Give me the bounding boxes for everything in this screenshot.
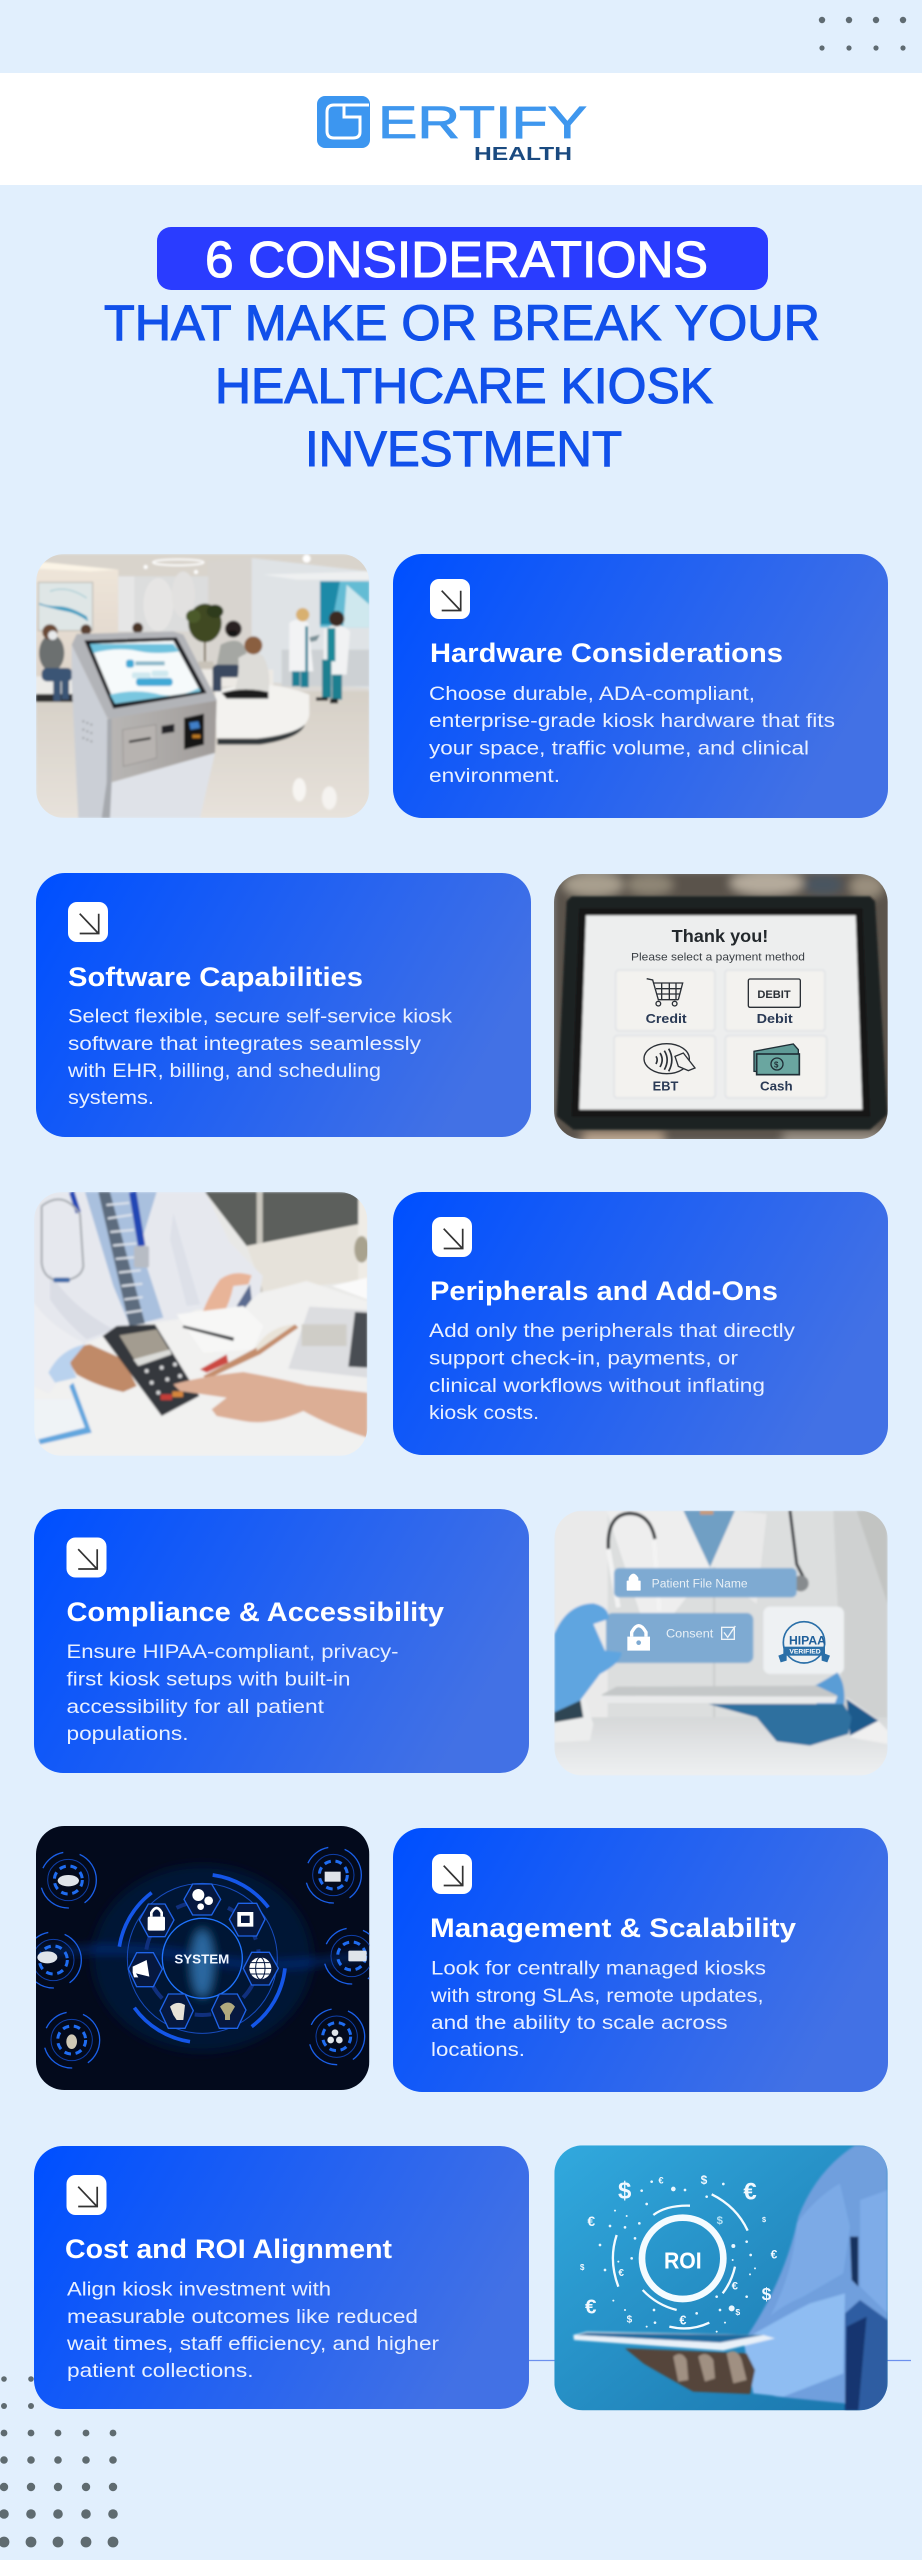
currency symbols: € — [771, 2247, 778, 2261]
ROI label: ROI — [664, 2247, 702, 2273]
card 3: peripherals and add-ons — [393, 1192, 888, 1455]
body text: Select flexible, secure self-service kiosk — [68, 1006, 452, 1028]
body text: accessibility for all patient — [66, 1696, 325, 1718]
body text: clinical workflows without inflating — [429, 1375, 765, 1397]
icon: arrow — [430, 579, 470, 619]
decorative dots: bottom left — [0, 2376, 118, 2547]
card background — [393, 554, 888, 818]
glow — [36, 1865, 369, 2052]
title line 4: INVESTMENT — [305, 421, 622, 477]
currency symbols: $ — [580, 2263, 585, 2272]
photo: doctor with payment terminal — [34, 1192, 369, 1456]
body text: software that integrates seamlessly — [68, 1033, 421, 1055]
card 5: management and scalability — [393, 1828, 888, 2092]
icon: arrow — [432, 1854, 472, 1894]
satellites — [25, 1847, 380, 2068]
body text — [429, 1320, 795, 1424]
card 6: cost and ROI alignment — [34, 2146, 529, 2409]
body text: systems. — [68, 1087, 154, 1109]
photo: system management network — [25, 1826, 380, 2090]
heading: Cost and ROI Alignment — [65, 2234, 392, 2264]
photo: payment selection screen — [550, 868, 897, 1145]
hexagons — [128, 1884, 278, 2028]
sleeve — [573, 2145, 888, 2410]
title block — [104, 227, 820, 477]
body text — [67, 1006, 452, 1109]
decorative dots: top right — [819, 17, 906, 51]
body text: populations. — [66, 1723, 188, 1745]
body text: with EHR, billing, and scheduling — [67, 1060, 381, 1082]
screen text: Cash — [760, 1079, 793, 1094]
particles — [599, 2180, 756, 2333]
body text: Look for centrally managed kiosks — [431, 1958, 766, 1980]
body text: support check-in, payments, or — [429, 1348, 739, 1370]
photo: kiosk in clinic lobby — [36, 554, 369, 818]
coat and desk — [554, 1511, 888, 1776]
hologram rings — [613, 2194, 748, 2328]
body text: kiosk costs. — [429, 1402, 539, 1424]
body text — [430, 1958, 766, 2061]
body text: enterprise-grade kiosk hardware that fits — [429, 710, 835, 732]
card background — [393, 1828, 888, 2092]
body text: locations. — [431, 2039, 525, 2061]
body text: Align kiosk investment with — [67, 2278, 331, 2300]
currency symbols: $ — [735, 2307, 740, 2317]
screen text: EBT — [653, 1079, 678, 1094]
logo: Certify Health: HEALTH — [474, 144, 572, 164]
title line 3: HEALTHCARE KIOSK — [215, 358, 713, 414]
header band with logo — [0, 73, 922, 185]
heading: Management & Scalability — [430, 1913, 796, 1943]
icon: arrow — [68, 902, 108, 942]
currency symbols: € — [679, 2313, 686, 2327]
icon: arrow — [432, 1217, 472, 1257]
heading: Software Capabilities — [68, 962, 363, 992]
screen text: DEBIT — [757, 989, 791, 1001]
body text: patient collections. — [67, 2360, 253, 2382]
card background — [393, 1192, 888, 1455]
screen text — [631, 926, 805, 1094]
currency symbols: € — [743, 2178, 757, 2205]
heading: Peripherals and Add-Ons — [430, 1276, 778, 1306]
screen text: Debit — [757, 1011, 793, 1026]
currency symbols: € — [587, 2213, 595, 2229]
heading: Hardware Considerations — [430, 638, 783, 668]
heading: Compliance & Accessibility — [66, 1597, 444, 1627]
title pill — [157, 227, 768, 290]
body text: first kiosk setups with built-in — [66, 1668, 350, 1690]
currency symbols: € — [585, 2295, 597, 2318]
dark background — [36, 1826, 369, 2090]
body text: and the ability to scale across — [431, 2012, 728, 2034]
title line 2: THAT MAKE OR BREAK YOUR — [104, 295, 820, 351]
card background — [36, 873, 531, 1137]
screen text: $ — [774, 1060, 779, 1069]
currency symbols: € — [732, 2280, 739, 2292]
rings — [119, 1875, 285, 2042]
logo: Certify Health — [317, 96, 587, 164]
body text: with strong SLAs, remote updates, — [430, 1985, 764, 2007]
body text: Choose durable, ADA-compliant, — [429, 683, 755, 705]
title line 1: 6 CONSIDERATIONS — [205, 231, 708, 288]
currency symbols: $ — [717, 2215, 724, 2227]
body text — [66, 2278, 440, 2382]
card 2: software capabilities — [36, 873, 531, 1137]
overlay labels: Consent — [666, 1626, 714, 1640]
overlay labels: VERIFIED — [789, 1649, 821, 1655]
body text: your space, traffic volume, and clinical — [429, 738, 809, 760]
center label: SYSTEM — [174, 1952, 229, 1966]
body text — [429, 683, 835, 787]
payment icons — [644, 979, 800, 1075]
currency symbols: $ — [627, 2315, 633, 2326]
hexagon icons — [133, 1889, 271, 2020]
card 1: hardware considerations — [393, 554, 888, 818]
body text — [66, 1641, 398, 1745]
body text: environment. — [429, 765, 560, 787]
overlay labels: HIPAA — [789, 1634, 826, 1648]
body text: wait times, staff efficiency, and higher — [66, 2333, 440, 2355]
icon: arrow — [66, 1538, 106, 1578]
blurred background — [550, 868, 897, 1145]
currency symbols: $ — [618, 2177, 631, 2204]
currency symbols: € — [658, 2175, 664, 2185]
photo: HIPAA verified doctor with tablet — [554, 1511, 888, 1776]
currency symbols: $ — [762, 2284, 772, 2304]
icon: arrow — [66, 2175, 106, 2215]
photo: ROI hologram over tablet — [554, 2145, 888, 2410]
body text: Add only the peripherals that directly — [429, 1320, 795, 1342]
screen text: Thank you! — [672, 926, 768, 946]
currency symbols: $ — [701, 2173, 708, 2187]
card background — [34, 1509, 529, 1773]
logo: Certify Health: ERTIFY — [378, 97, 587, 148]
screen text: Please select a payment method — [631, 952, 805, 964]
screen text: Credit — [646, 1011, 687, 1026]
background — [554, 2145, 888, 2410]
body text: Ensure HIPAA-compliant, privacy- — [66, 1641, 398, 1663]
currency symbols: $ — [762, 2215, 766, 2224]
card 4: compliance and accessibility — [34, 1509, 529, 1773]
body text: measurable outcomes like reduced — [67, 2306, 418, 2328]
card background — [34, 2146, 529, 2409]
currency symbols: € — [618, 2268, 624, 2279]
overlay labels — [627, 1574, 830, 1663]
currency symbols — [580, 2173, 778, 2327]
overlay labels: Patient File Name — [652, 1576, 748, 1590]
